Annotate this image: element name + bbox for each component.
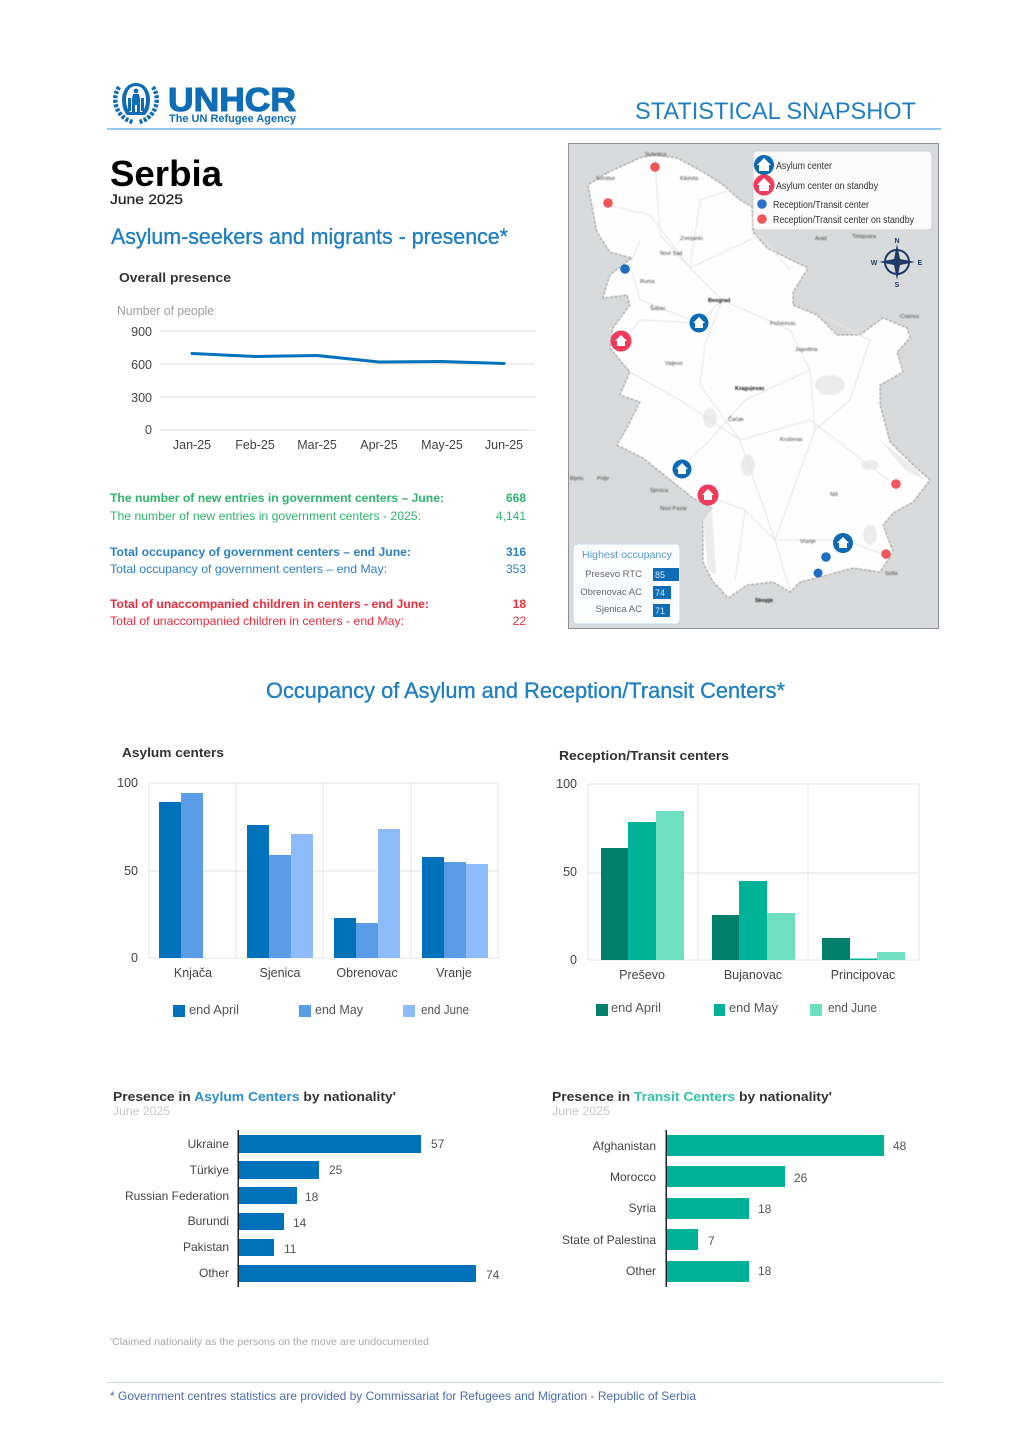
date: June 2025: [110, 191, 183, 207]
bar chart: asylum centers: [117, 745, 498, 1017]
country labels: [125, 1137, 229, 1280]
chart legend: end April: [189, 1003, 239, 1017]
map: place names: Požarevac: [770, 321, 796, 327]
icon: compass rose: [871, 238, 923, 289]
country labels: Afghanistan: [593, 1139, 656, 1153]
map: place names: Čačak: [728, 416, 744, 423]
category labels: Obrenovac: [336, 966, 398, 980]
values: 11: [284, 1242, 297, 1256]
map: place names: Beograd: [708, 298, 730, 304]
x axis labels: Apr-25: [360, 438, 398, 452]
values: 57: [431, 1137, 445, 1151]
map markers: reception/transit standby: [603, 162, 901, 559]
values: 25: [329, 1163, 343, 1177]
map: place names: Bijelo: [570, 476, 583, 482]
country labels: [562, 1139, 656, 1278]
map: roads: [607, 160, 895, 590]
chart title: Presence in Transit Centers by nationality': [552, 1089, 832, 1104]
y axis labels: 50: [563, 865, 577, 879]
stats: occupancy: Total occupancy of government centers – end June:: [110, 545, 411, 559]
values: 14: [293, 1216, 307, 1230]
bars: [667, 1135, 884, 1282]
y axis labels: 0: [570, 953, 577, 967]
icon: asylum center: [754, 155, 774, 175]
y axis labels: 100: [117, 776, 138, 790]
footnote: nationality: 'Claimed nationality as the persons on the move are undocumented: [110, 1337, 429, 1348]
bar chart: transit nationality: [552, 1089, 907, 1287]
map: place names: Novi Pazar: [660, 506, 687, 512]
values: 18: [305, 1190, 319, 1204]
icon: compass rose: S: [895, 282, 900, 289]
stats: new entries: 668: [506, 491, 526, 505]
category labels: Sjenica: [260, 966, 301, 980]
stats: new entries: The number of new entries in government centers - 2025:: [110, 509, 421, 523]
x axis labels: Mar-25: [297, 438, 337, 452]
stats: unaccompanied children: 18: [513, 597, 526, 611]
occupancy title: Highest occupancy: [582, 549, 673, 561]
heading: occupancy: Occupancy of Asylum and Reception/Transit Centers*: [266, 678, 785, 703]
stats: unaccompanied children: 22: [513, 614, 526, 628]
bar chart: asylum nationality: [113, 1089, 500, 1287]
country labels: Ukraine: [188, 1137, 229, 1151]
occupancy row: Obrenovac: Obrenovac AC: [580, 587, 642, 598]
stats: unaccompanied children: Total of unaccompanied children in centers - end June:: [110, 597, 429, 611]
y axis labels: 900: [131, 325, 152, 339]
country labels: State of Palestina: [562, 1233, 656, 1247]
map: place names: Vranje: [800, 539, 816, 545]
y axis labels: 100: [556, 777, 577, 791]
presence line: [192, 354, 504, 364]
category labels: [174, 966, 472, 980]
legend label: reception center on standby: Reception/Transit center on standby: [773, 215, 914, 226]
logo tagline: The UN Refugee Agency: [169, 113, 297, 125]
map: place names: Kikinda: [680, 176, 699, 182]
footnote: source: * Government centres statistics are provided by Commissariat for Refugees and Migration - Republic of Serbia: [110, 1389, 696, 1403]
map: place names: [570, 152, 920, 604]
panel: map of Serbia: [568, 143, 939, 629]
title: Serbia: Serbia: [110, 153, 223, 194]
x axis labels: Feb-25: [235, 438, 275, 452]
chart title: Overall presence: [119, 270, 231, 285]
country labels: Morocco: [610, 1170, 656, 1184]
category labels: Principovac: [831, 968, 895, 982]
country labels: Burundi: [188, 1214, 229, 1228]
map: place names: Ruma: [640, 279, 656, 285]
occupancy row: Obrenovac: 74: [655, 588, 665, 598]
values: 48: [893, 1139, 907, 1153]
category labels: Preševo: [619, 968, 665, 982]
chart legend: end May: [729, 1001, 779, 1015]
occupancy row: Presevo: Presevo RTC: [585, 569, 642, 580]
country labels: Russian Federation: [125, 1189, 229, 1203]
map: place names: Novi Sad: [660, 251, 682, 257]
icon: compass rose: W: [871, 260, 878, 267]
x axis labels: Jan-25: [173, 438, 211, 452]
stats: occupancy: 316: [506, 545, 526, 559]
bar chart: reception/transit centers: [556, 748, 919, 1016]
map: place names: Kragujevac: [735, 386, 765, 392]
values: 74: [486, 1268, 500, 1282]
chart legend: [596, 1001, 877, 1016]
icon: reception center: [757, 199, 767, 209]
bars: [239, 1135, 476, 1282]
map: place names: Polje: [597, 476, 609, 482]
occupancy row: Presevo: [585, 568, 679, 581]
UNHCR logo: [115, 81, 297, 125]
chart title: Presence in Asylum Centers by nationality': [113, 1089, 396, 1104]
bars: end May: [181, 793, 466, 958]
stats: occupancy: 353: [506, 562, 526, 576]
chart legend: end June: [421, 1003, 469, 1017]
legend label: asylum center: Asylum center: [776, 161, 833, 172]
y axis labels: [117, 776, 138, 965]
map: Serbia territory: [588, 155, 930, 598]
category labels: Vranje: [436, 966, 472, 980]
map: place names: Sjenica: [650, 488, 669, 494]
stats: occupancy: Total occupancy of government centers – end May:: [110, 562, 387, 576]
header: [115, 81, 916, 125]
stats: new entries: The number of new entries in government centers – June:: [110, 491, 444, 505]
x axis labels: Jun-25: [485, 438, 523, 452]
country labels: Other: [199, 1266, 229, 1280]
occupancy row: Presevo: 85: [655, 570, 665, 580]
country labels: Other: [626, 1264, 656, 1278]
stats: new entries: [110, 491, 526, 523]
map: place names: Šabac: [650, 305, 666, 312]
y axis labels: [131, 325, 152, 437]
map markers: reception/transit: [620, 264, 831, 578]
map: place names: Subotica: [645, 152, 667, 158]
category labels: Knjača: [174, 966, 212, 980]
x axis labels: May-25: [421, 438, 463, 452]
chart legend: [173, 1003, 469, 1017]
country labels: Türkiye: [190, 1163, 229, 1177]
values: 18: [758, 1264, 772, 1278]
bars: end April: [159, 802, 444, 958]
map: place names: Jagodina: [795, 347, 818, 353]
logo wordmark: UNHCR: [168, 81, 296, 118]
values: [284, 1137, 500, 1282]
stats: unaccompanied children: Total of unaccompanied children in centers - end May:: [110, 614, 404, 628]
map: place names: Arad: [815, 236, 827, 242]
chart subtitle: June 2025: [113, 1106, 170, 1118]
bars: end May: [628, 822, 877, 960]
bars: end June: [656, 811, 905, 960]
axis title: Number of people: [117, 304, 214, 318]
map: place names: Valjevo: [665, 361, 683, 367]
y axis labels: 300: [131, 391, 152, 405]
occupancy row: Obrenovac: [580, 586, 671, 599]
map markers: asylum centers on standby: [610, 330, 718, 506]
panel: highest occupancy: [573, 544, 680, 624]
country labels: Pakistan: [183, 1240, 229, 1254]
legend label: asylum center on standby: Asylum center on standby: [776, 181, 878, 192]
map: terrain shading: [703, 375, 925, 575]
icon: asylum center on standby: [754, 174, 774, 196]
icon: UNHCR emblem: [115, 83, 157, 122]
legend label: reception center: Reception/Transit center: [773, 200, 870, 211]
chart title: Reception/Transit centers: [559, 748, 729, 763]
values: 26: [794, 1171, 808, 1185]
stats: unaccompanied children: [110, 597, 526, 628]
map: place names: Timișoara: [852, 234, 877, 240]
occupancy row: Sjenica: 71: [655, 606, 665, 616]
category labels: [619, 968, 895, 982]
map markers: asylum centers: [672, 314, 853, 553]
values: [708, 1139, 907, 1278]
stats: occupancy: [110, 545, 526, 576]
country labels: Syria: [629, 1201, 656, 1215]
y axis labels: 600: [131, 358, 152, 372]
bars: end April: [601, 848, 850, 960]
map: place names: Skopje: [755, 598, 773, 604]
map: place names: Sombor: [596, 176, 615, 182]
values: 18: [758, 1202, 772, 1216]
bars: end June: [291, 829, 488, 958]
snapshot title: STATISTICAL SNAPSHOT: [635, 98, 916, 125]
line chart: overall presence: [117, 270, 535, 452]
icon: compass rose: E: [918, 260, 923, 267]
y axis labels: 0: [131, 951, 138, 965]
map: place names: Sofia: [885, 571, 898, 577]
map: place names: Niš: [830, 492, 838, 498]
x axis labels: [173, 438, 523, 452]
heading: presence: Asylum-seekers and migrants - presence*: [111, 224, 508, 249]
values: 7: [708, 1234, 715, 1248]
stats: new entries: 4,141: [496, 509, 526, 523]
icon: compass rose: N: [894, 238, 900, 245]
y axis labels: 50: [124, 864, 138, 878]
map: place names: Kruševac: [780, 437, 803, 443]
chart legend: end April: [611, 1001, 661, 1015]
y axis labels: 0: [145, 423, 152, 437]
chart legend: end June: [828, 1001, 877, 1015]
map legend: [753, 151, 932, 230]
y axis labels: [556, 777, 577, 967]
map: place names: Zrenjanin: [680, 236, 703, 242]
icon: reception center on standby: [757, 214, 767, 224]
occupancy row: Sjenica: [596, 604, 670, 617]
category labels: Bujanovac: [724, 968, 782, 982]
chart legend: end May: [315, 1003, 364, 1017]
chart title: Asylum centers: [122, 745, 224, 760]
map: place names: Craiova: [900, 314, 920, 320]
chart subtitle: June 2025: [552, 1106, 610, 1118]
occupancy row: Sjenica: Sjenica AC: [596, 604, 642, 615]
